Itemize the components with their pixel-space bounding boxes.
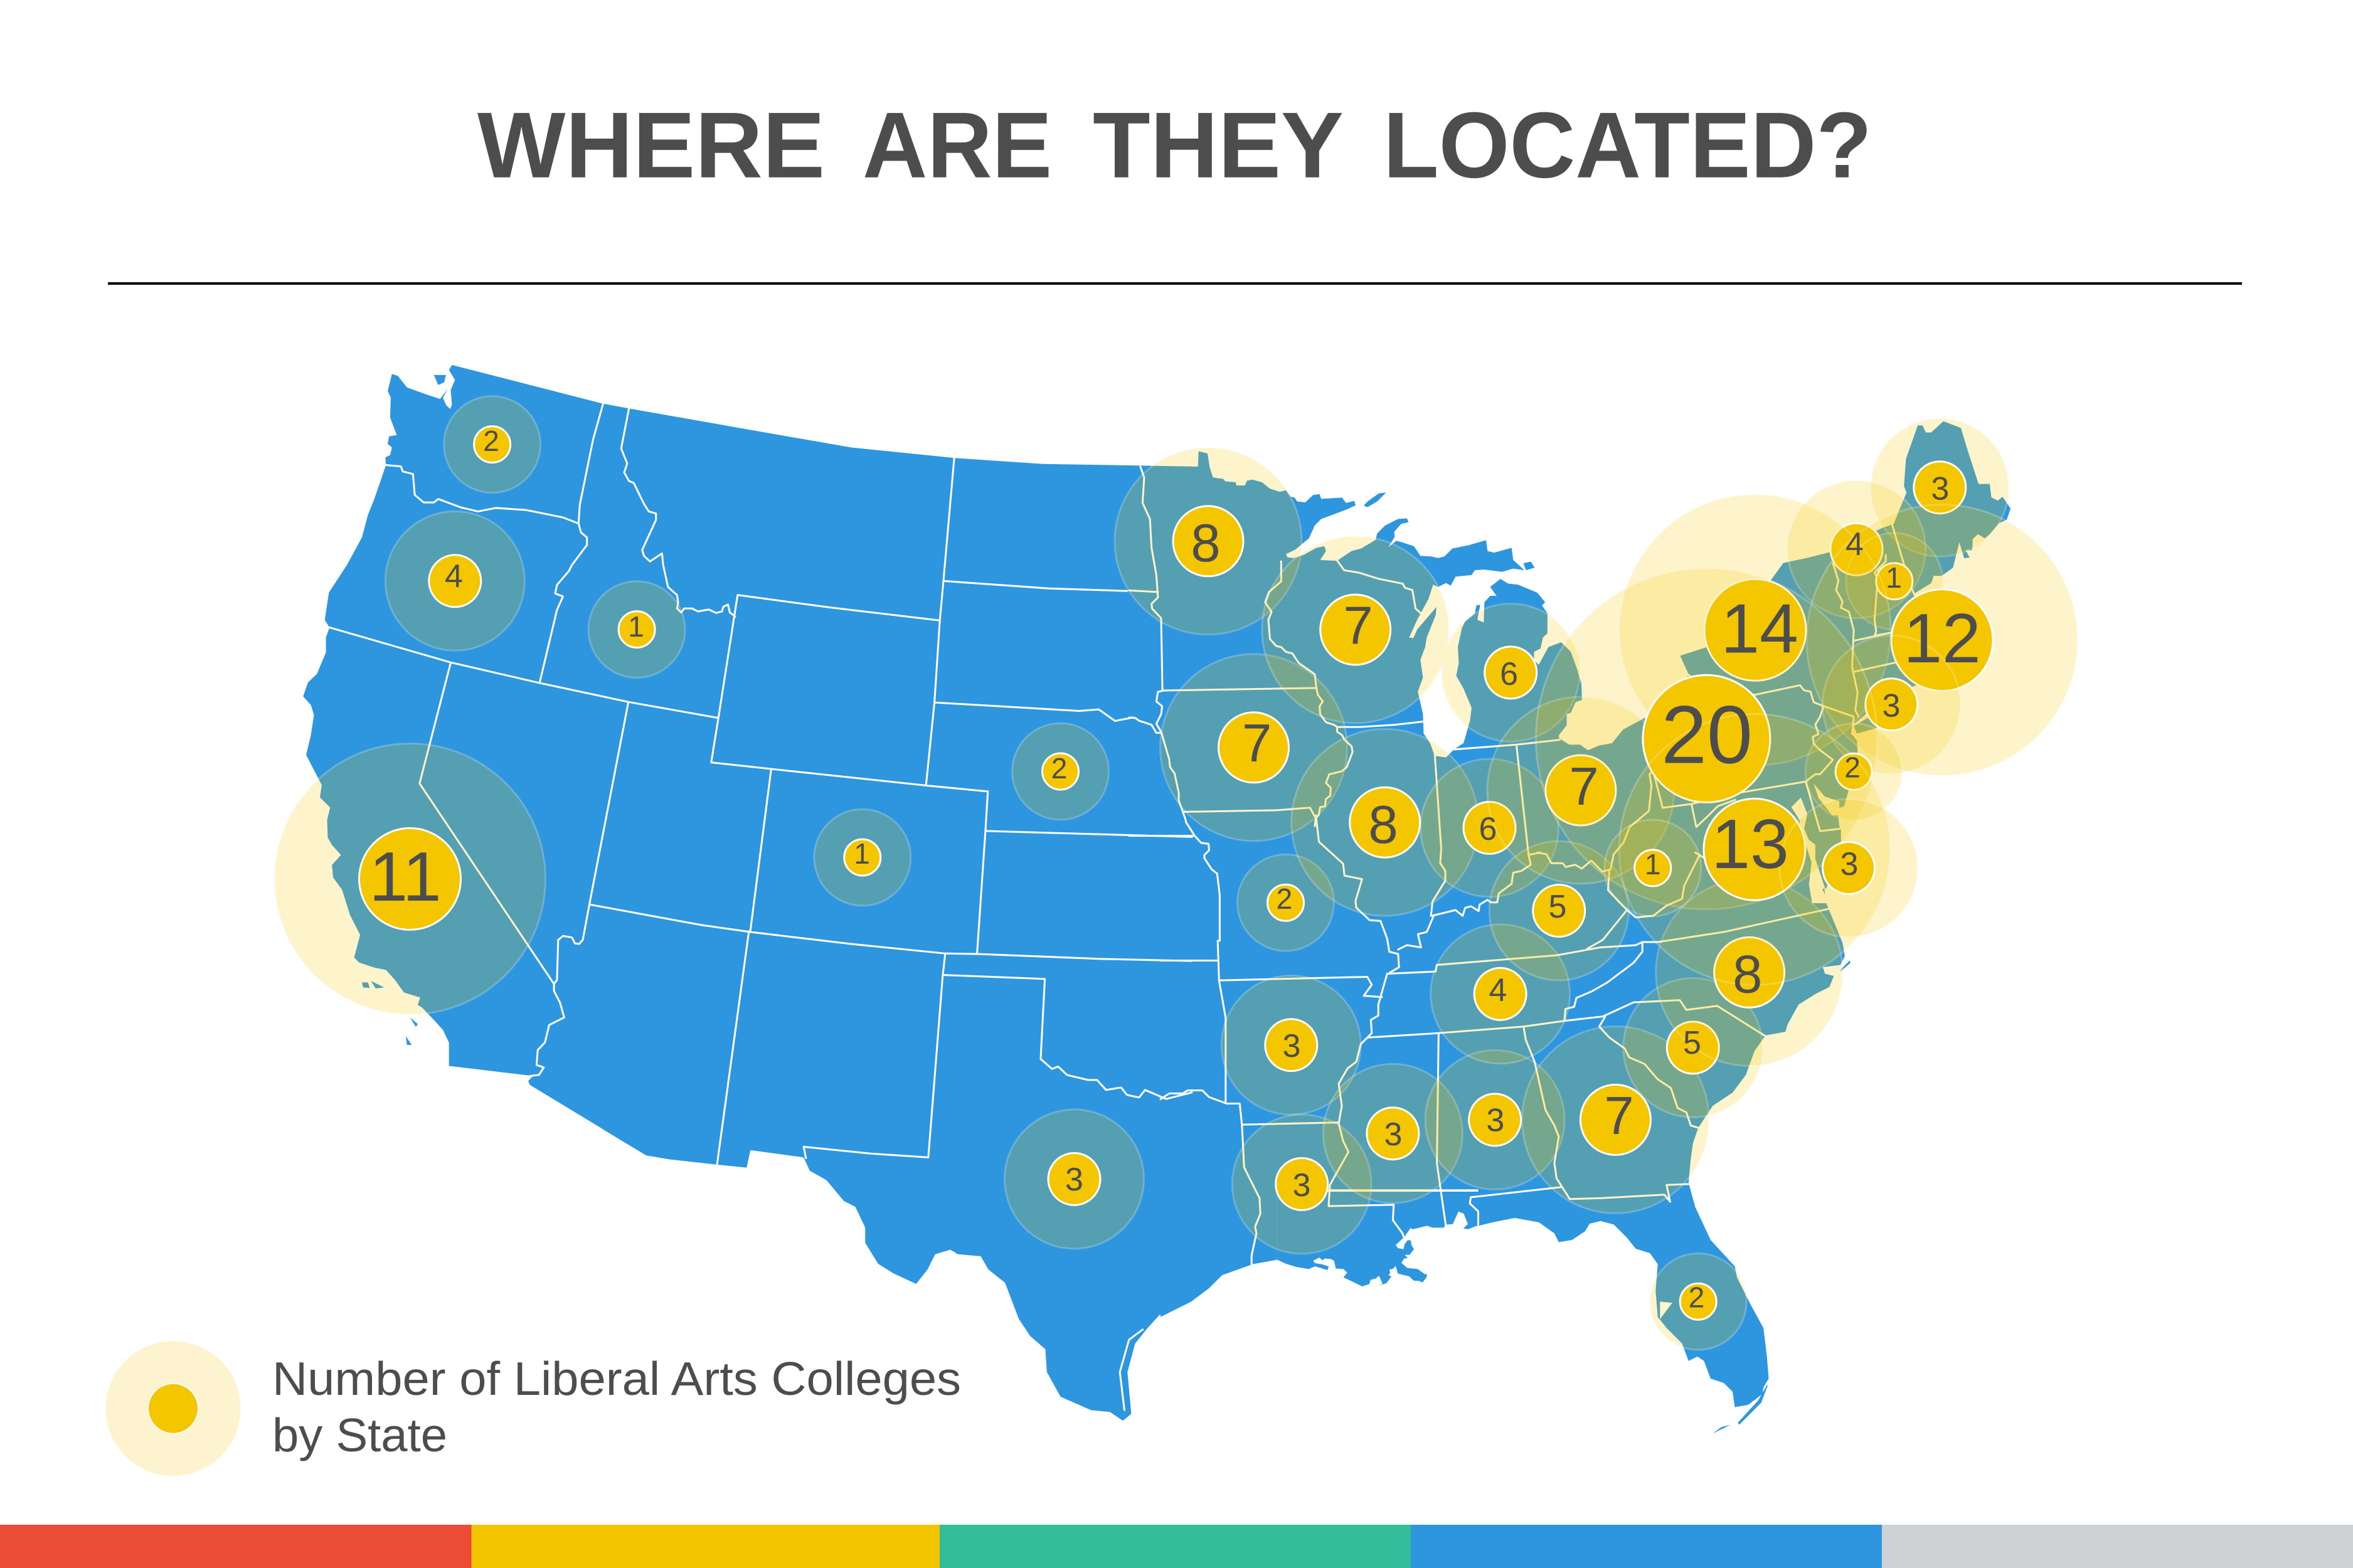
bubble: Connecticut (1822, 635, 1960, 773)
college count numbers: 3 (1293, 1167, 1310, 1204)
bubble: California (275, 743, 546, 1014)
college count numbers: 1 (628, 610, 644, 643)
college count numbers: 12 (1903, 600, 1981, 677)
college count numbers: 11 (369, 838, 442, 916)
college count numbers: 4 (445, 558, 463, 595)
college count numbers: 14 (1721, 590, 1798, 667)
bubble: Vermont (1788, 480, 1926, 618)
college count numbers: 2 (1689, 1281, 1704, 1313)
college count numbers: 7 (1569, 757, 1599, 817)
bubble: North Carolina (1656, 879, 1843, 1066)
legend icon (105, 1341, 241, 1476)
college count numbers: 13 (1711, 805, 1789, 883)
college count numbers: 7 (1242, 714, 1272, 773)
bubble: Iowa (1161, 654, 1347, 841)
college count numbers: 7 (1604, 1086, 1634, 1146)
land mass (303, 365, 2010, 1434)
college count numbers: 3 (1283, 1028, 1300, 1064)
college count numbers: 6 (1479, 811, 1497, 847)
bubble: Illinois (1292, 729, 1479, 916)
bubble: Massachusetts (1807, 505, 2078, 776)
college count numbers (369, 425, 1981, 1313)
college count numbers: 1 (1886, 561, 1902, 594)
bubble: Maine (1871, 418, 2009, 556)
college count numbers: 3 (1065, 1162, 1083, 1198)
bubble: Oregon (385, 511, 524, 650)
bubble: Colorado (814, 809, 911, 906)
footer colour bar (0, 1525, 2353, 1568)
college count numbers: 3 (1883, 687, 1900, 724)
bubble: Arkansas (1221, 975, 1361, 1115)
bubble: Georgia (1522, 1026, 1709, 1213)
college count numbers: 20 (1661, 689, 1753, 780)
map of the United States (303, 365, 2010, 1434)
legend text: Number of Liberal Arts Colleges (272, 1352, 961, 1405)
college count numbers: 4 (1489, 972, 1507, 1009)
bubble: Pennsylvania (1536, 568, 1877, 909)
title: THEY (1093, 93, 1344, 198)
college count numbers: 1 (1645, 848, 1660, 881)
bubble: Wisconsin (1262, 536, 1449, 723)
bubble: New York (1620, 494, 1891, 765)
college count numbers: 6 (1500, 656, 1518, 692)
title: WHERE (477, 93, 825, 198)
bubble: Delaware (1780, 799, 1918, 937)
legend text: by State (272, 1409, 447, 1461)
college count numbers: 2 (1844, 751, 1861, 784)
bubble: Mississippi (1323, 1064, 1462, 1203)
college count numbers: 7 (1343, 596, 1373, 656)
college count numbers: 5 (1683, 1025, 1701, 1061)
college count numbers: 8 (1733, 945, 1762, 1005)
college count numbers: 8 (1368, 795, 1398, 855)
college count numbers: 8 (1191, 514, 1221, 573)
title (477, 93, 1872, 198)
college count bubbles (275, 396, 2078, 1350)
bubble: Idaho (588, 581, 685, 678)
bubble: Tennessee (1431, 924, 1570, 1064)
state borders (329, 403, 1915, 1410)
bubble: Nebraska (1012, 723, 1109, 820)
bubble: Louisiana (1232, 1115, 1371, 1254)
bays and sounds (1660, 798, 1830, 1319)
college count numbers: 5 (1549, 889, 1566, 925)
bubble: West Virginia (1605, 820, 1701, 916)
bubble: New Hampshire (1846, 533, 1943, 630)
bubble: Texas (1005, 1110, 1144, 1249)
college count numbers: 2 (1277, 882, 1292, 915)
bubble: Missouri (1237, 854, 1334, 951)
bubble: Ohio (1487, 697, 1674, 884)
title: LOCATED? (1383, 93, 1872, 198)
college count numbers: 2 (1051, 752, 1067, 785)
bubble: New Jersey (1805, 723, 1902, 820)
college count numbers: 3 (1931, 471, 1949, 507)
bubble: Minnesota (1115, 448, 1302, 635)
legend text (272, 1352, 961, 1461)
bubble: Florida (1650, 1253, 1746, 1350)
college count numbers: 1 (854, 837, 870, 870)
college count numbers: 3 (1384, 1116, 1402, 1153)
college count numbers: 3 (1486, 1103, 1504, 1139)
bubble: South Carolina (1623, 978, 1763, 1117)
college count numbers: 4 (1846, 526, 1864, 563)
bubble: Michigan (1442, 603, 1580, 741)
college count numbers: 3 (1840, 846, 1858, 882)
college count numbers: 2 (483, 425, 499, 457)
bubble: Indiana (1420, 759, 1558, 897)
title: ARE (863, 93, 1052, 198)
bubble: Virginia (1619, 714, 1890, 985)
legend (105, 1341, 961, 1476)
bubble: Washington (444, 396, 541, 493)
bubble: Kentucky (1489, 841, 1628, 980)
bubble: Alabama (1425, 1050, 1564, 1189)
